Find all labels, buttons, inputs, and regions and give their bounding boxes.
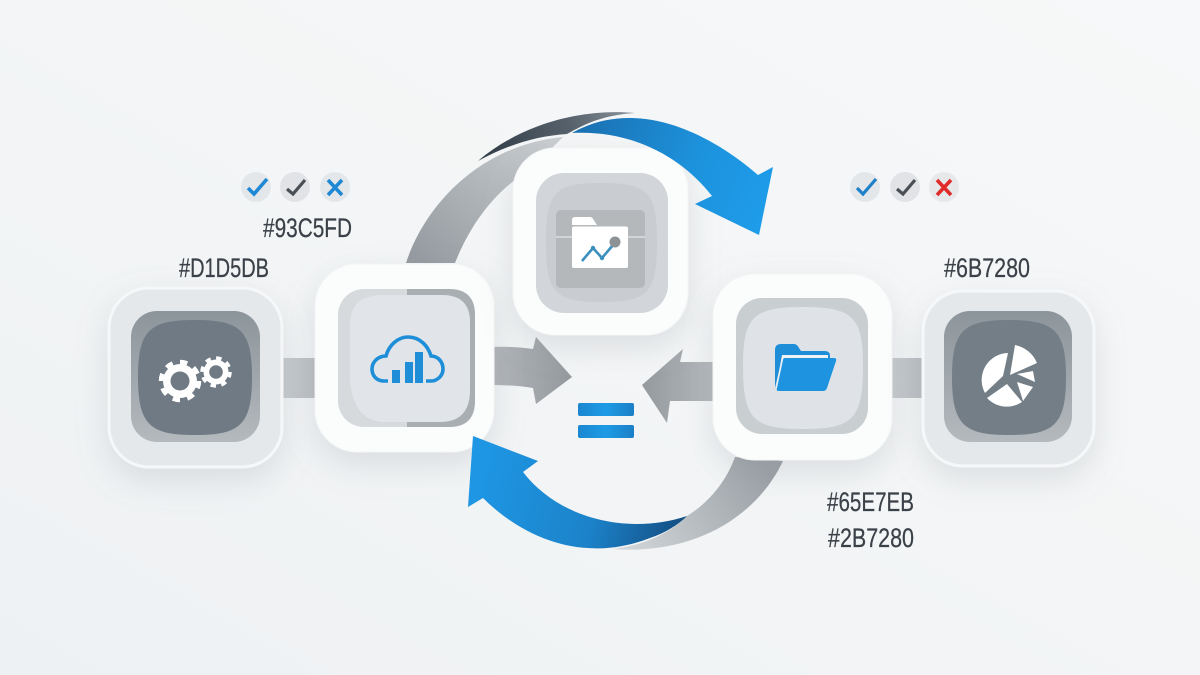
label: #65E7EB: #65E7EB <box>827 487 914 517</box>
status icons: right group <box>850 172 959 202</box>
arrow: folder to equals <box>642 349 716 423</box>
label: #6B7280: #6B7280 <box>944 253 1030 283</box>
status icons: left group <box>241 172 350 202</box>
label: #D1D5DB: #D1D5DB <box>179 253 269 283</box>
icon: gears <box>161 358 230 400</box>
icon: pie chart <box>982 345 1037 407</box>
card: pie chart <box>923 291 1094 466</box>
connector: gears to cloud <box>280 358 316 398</box>
icon: cloud with bars <box>372 337 443 383</box>
equals sign <box>578 403 634 438</box>
card: chart folder <box>513 148 688 335</box>
arc: gray top loop <box>406 137 563 263</box>
arc: gray bottom loop <box>613 457 783 550</box>
arc: dark top loop <box>478 112 635 161</box>
card: gears <box>109 288 282 467</box>
label: #2B7280: #2B7280 <box>828 523 914 553</box>
arrow: blue bottom <box>468 436 687 548</box>
icon: open folder <box>775 344 836 391</box>
connector: folder to pie <box>890 358 922 398</box>
arrow: cloud to equals <box>490 337 572 404</box>
card: cloud <box>315 264 494 452</box>
arrow: blue top <box>572 118 773 235</box>
label: #93C5FD: #93C5FD <box>263 213 352 243</box>
icon: folder with trend line <box>572 217 628 268</box>
card: open folder <box>713 274 892 460</box>
